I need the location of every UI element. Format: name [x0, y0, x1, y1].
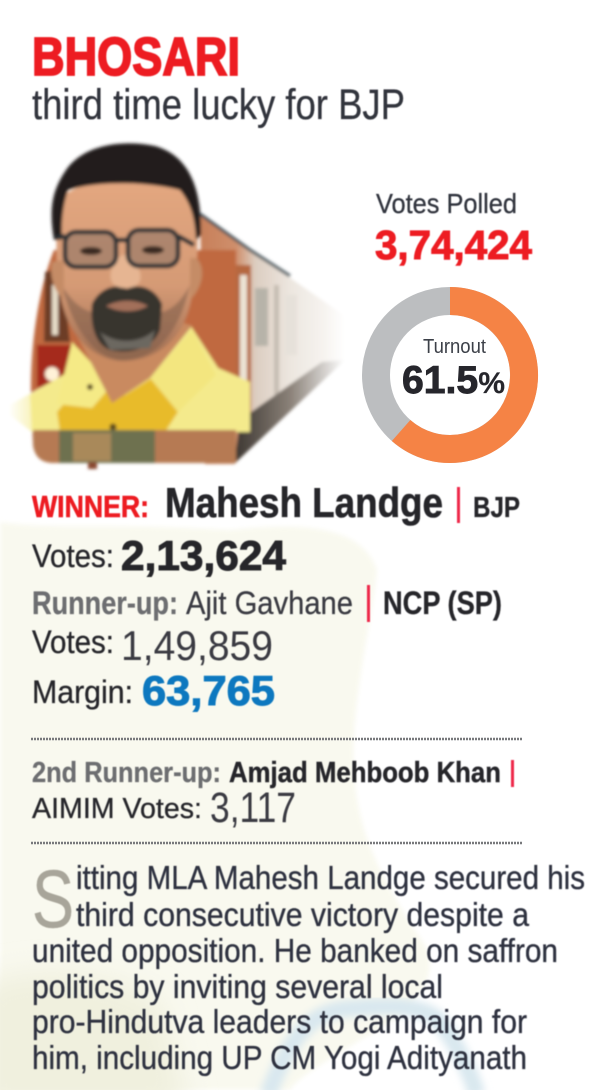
second runner-up line: 2nd Runner-up:	[32, 757, 221, 789]
train side	[200, 214, 345, 464]
nose	[111, 254, 141, 288]
margin: Margin:	[32, 674, 133, 710]
winner line: BJP	[473, 492, 520, 524]
body paragraph: third consecutive victory despite a	[76, 896, 530, 933]
second runner-up votes	[32, 784, 296, 832]
votes polled value: 3,74,424	[375, 222, 532, 268]
donut remainder	[376, 301, 524, 449]
runner-up line: Runner-up:	[32, 585, 178, 621]
body paragraph	[32, 859, 585, 1076]
stubble	[62, 285, 190, 360]
votes polled label: Votes Polled	[376, 188, 517, 219]
title: BHOSARI	[32, 27, 240, 87]
body paragraph: united opposition. He banked on saffron	[32, 932, 558, 969]
train lower band	[33, 430, 236, 469]
face	[56, 178, 198, 361]
winner votes: Votes:	[32, 538, 114, 574]
runner-up votes	[32, 622, 273, 669]
margin	[32, 667, 275, 714]
glasses	[56, 230, 194, 267]
runner-up line	[32, 585, 502, 622]
runner-up votes: Votes:	[32, 624, 114, 660]
winner votes	[32, 532, 287, 579]
eyes	[80, 246, 164, 255]
winner line	[32, 479, 520, 526]
background wash	[0, 522, 477, 1090]
winner votes: 2,13,624	[121, 532, 287, 579]
turnout value: 61.5%	[402, 359, 505, 402]
body paragraph: pro-Hindutva leaders to campaign for	[32, 1003, 527, 1040]
second runner-up line: Amjad Mehboob Khan	[229, 757, 501, 789]
drop cap: S	[32, 854, 74, 945]
shirt	[10, 325, 250, 432]
runner-up line: Ajit Gavhane	[186, 585, 353, 621]
donut turnout share	[401, 301, 524, 449]
turnout label: Turnout	[423, 336, 486, 358]
hair	[52, 143, 201, 240]
runner-up line: NCP (SP)	[383, 585, 502, 621]
margin: 63,765	[142, 667, 275, 714]
body paragraph: politics by inviting several local	[32, 968, 443, 1005]
portrait of candidate over metro train	[10, 143, 345, 469]
second runner-up votes: AIMIM Votes:	[32, 793, 202, 825]
runner-up votes: 1,49,859	[121, 622, 273, 669]
beard and moustache	[92, 286, 162, 351]
winner line: Mahesh Landge	[165, 479, 443, 526]
second runner-up line	[32, 757, 514, 789]
second runner-up votes: 3,117	[210, 784, 296, 832]
train front	[31, 250, 236, 463]
body paragraph: him, including UP CM Yogi Adityanath	[32, 1039, 527, 1076]
turnout donut chart	[376, 301, 524, 449]
neck	[74, 318, 192, 403]
winner line: WINNER:	[32, 489, 149, 524]
subtitle: third time lucky for BJP	[32, 81, 405, 129]
ear	[51, 258, 202, 300]
